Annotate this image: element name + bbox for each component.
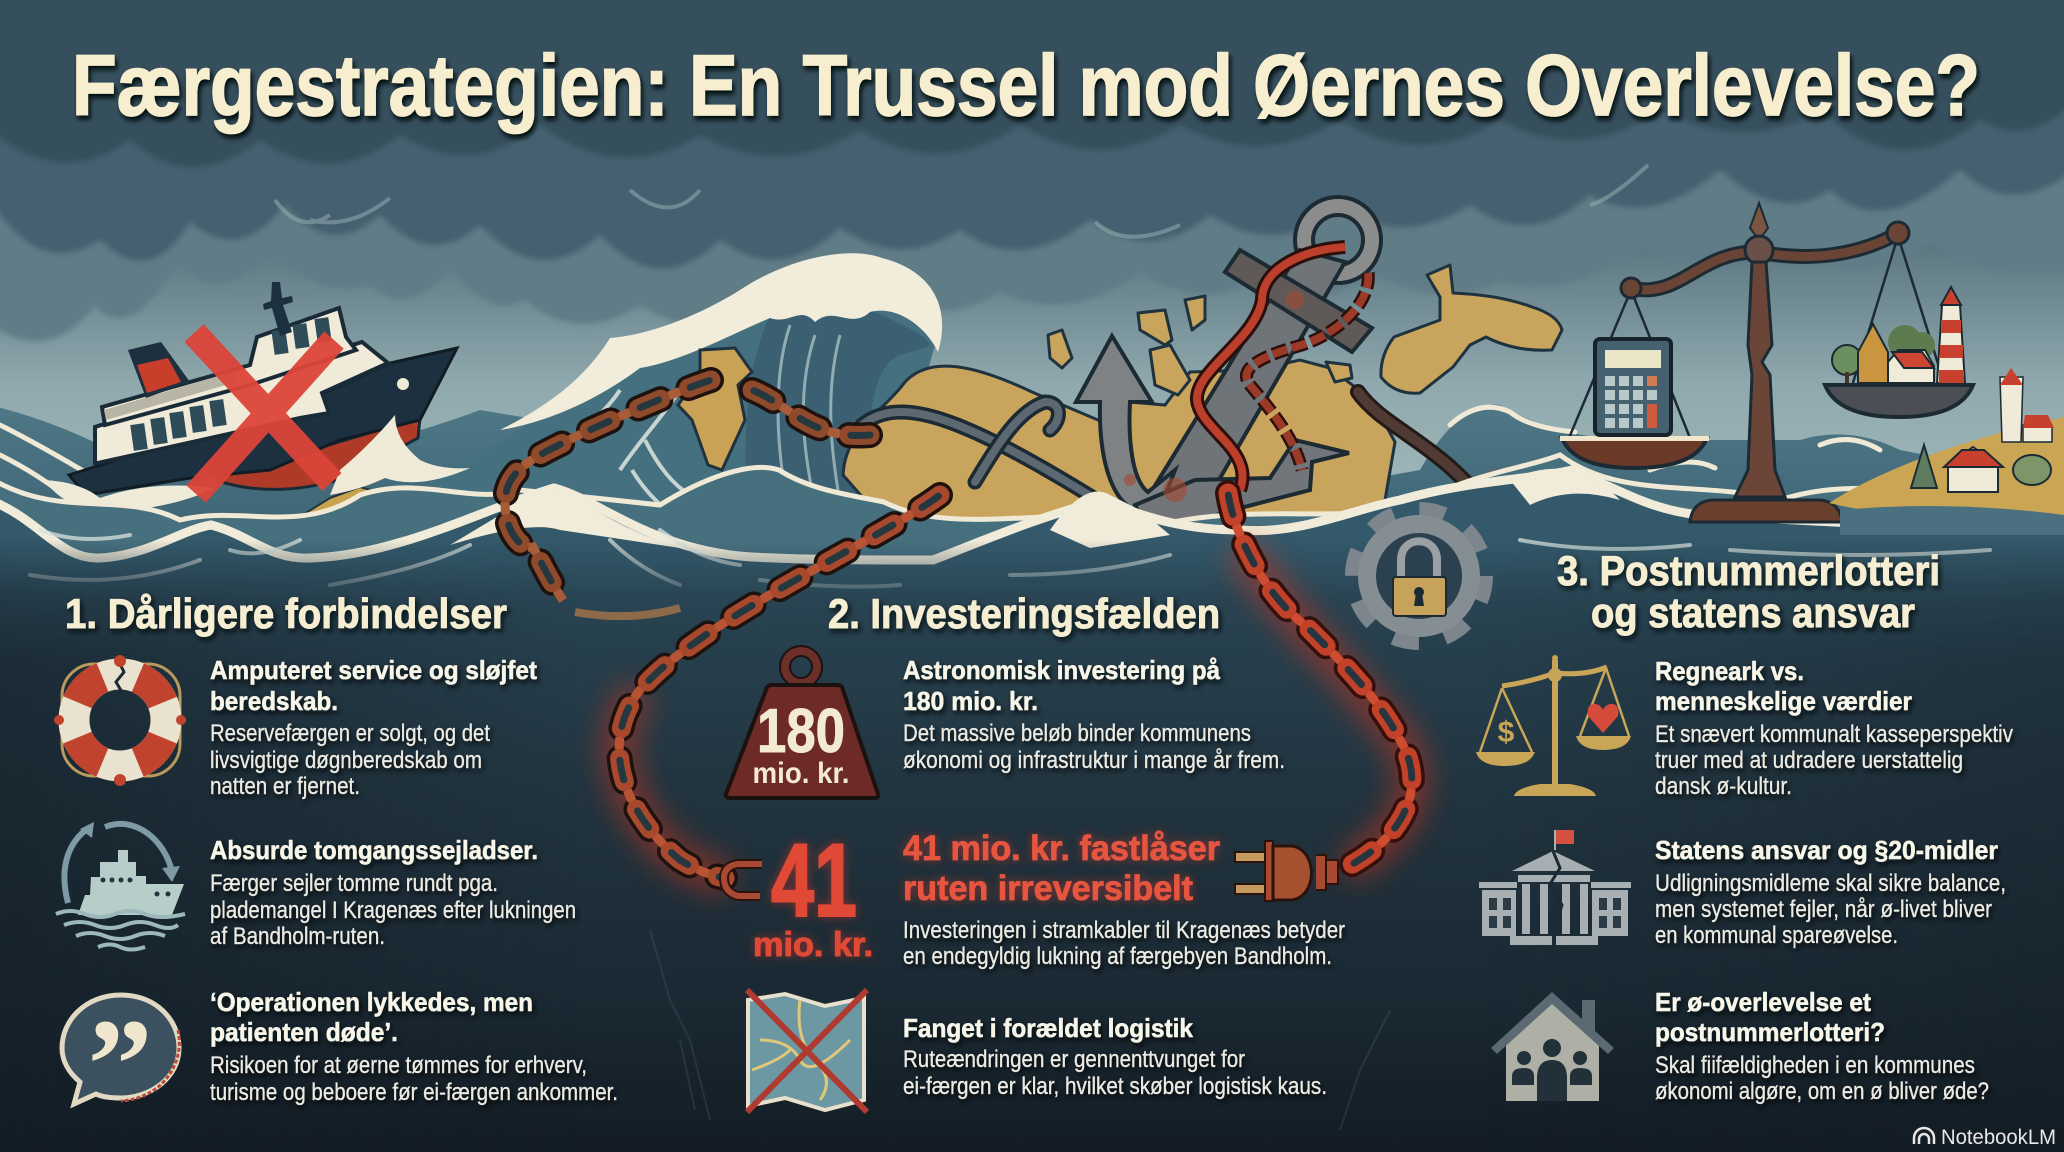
text: Amputeret service: Amputeret service og sløjfet (210, 655, 537, 685)
text: Astronomisk investering: økonomi og infrastruktur i mange år frem. (903, 747, 1285, 774)
back sea foam (0, 407, 1880, 500)
icon: large scales (1560, 203, 1973, 522)
heading: section 1: 1. Dårligere forbindelser (65, 590, 507, 637)
heading: section 3: 3. Postnummerlotteri (1557, 547, 1940, 594)
text: 41 mio. kr. fastlåser (903, 829, 1345, 970)
chain: between islands (752, 390, 870, 435)
text: Astronomisk investering (903, 655, 1285, 774)
background: stormy sky (0, 0, 2064, 620)
text: Absurde tomgangssejladser (210, 835, 576, 950)
text: Absurde tomgangssejladser: plademangel I Kragenæs efter lukningen (210, 897, 576, 924)
icon: quote bubble: ” (88, 993, 152, 1137)
icon: house with family (1491, 992, 1614, 1101)
background: dark lower panel (0, 540, 2064, 1152)
icon: gold scales (1476, 655, 1631, 796)
icon: broken lifebuoy (54, 655, 186, 786)
chain: glowing red right (1228, 493, 1412, 868)
front waves (0, 455, 2064, 660)
island: right hill with houses (1829, 368, 2064, 535)
text: 41 mio. kr. fastlåser: ruten irreversibelt (903, 869, 1193, 908)
text: Regneark vs.: Et snævert kommunalt kasseperspektiv (1655, 721, 2013, 748)
text: Amputeret service: Reservefærgen er solgt, og det (210, 720, 490, 747)
icon: rusty anchor (1076, 206, 1372, 538)
text: Statens ansvar (1655, 835, 2006, 949)
heading: section 2: 2. Investeringsfælden (828, 590, 1220, 637)
text: Statens ansvar: men systemet fejler, når ø-livet bliver (1655, 896, 1992, 923)
text: Amputeret service (210, 655, 537, 800)
icon: cracked state building (1479, 830, 1631, 945)
logo: NotebookLM: NotebookLM (1941, 1126, 2056, 1149)
text: Er ø-overlevelse: postnummerlotteri? (1655, 1017, 1885, 1047)
island: fragments (1048, 296, 1352, 395)
chain: wrapped around anchor (1197, 247, 1368, 490)
icon: weight 180 mio. kr.: 180 (757, 697, 845, 766)
heading: section 3 (1557, 547, 1940, 636)
icon: gear with padlock (1355, 512, 1483, 640)
stat: 41 mio. kr. (753, 823, 873, 964)
text: Astronomisk investering: 180 mio. kr. (903, 686, 1038, 716)
text: Operationen lykkedes: Risikoen for at øerne tømmes for erhverv, (210, 1052, 587, 1079)
panel: 2. Investeringsfælden (724, 590, 1345, 1112)
icon: gold scales: $ (1498, 716, 1515, 749)
text: Amputeret service: natten er fjernet. (210, 773, 360, 800)
icon: weight 180 mio. kr. (726, 651, 878, 798)
text: Statens ansvar: en kommunal spareøvelse. (1655, 922, 1898, 949)
text: Regneark vs.: dansk ø-kultur. (1655, 773, 1792, 800)
red glow behind chain (619, 547, 1412, 878)
text: Absurde tomgangssejladser: Færger sejler tomme rundt pga. (210, 870, 498, 897)
text: Fanget i forældet logistik: ei-færgen er klar, hvilket skøber logistisk kaus. (903, 1073, 1327, 1100)
text: Er ø-overlevelse (1655, 987, 1989, 1105)
text: Astronomisk investering: Astronomisk investering på (903, 655, 1220, 685)
icon: crossed-out map (747, 990, 867, 1112)
text: Regneark vs.: menneskelige værdier (1655, 686, 1912, 716)
stat: 41 mio. kr.: 41 (771, 823, 857, 939)
island: left fragment (678, 348, 752, 470)
icon: cable plug (1235, 841, 1338, 901)
text: Operationen lykkedes: ‘Operationen lykkedes, men (210, 987, 533, 1017)
text: 41 mio. kr. fastlåser: Investeringen i stramkabler til Kragenæs betyder (903, 917, 1345, 944)
text: 41 mio. kr. fastlåser: en endegyldig lukning af færgebyen Bandholm. (903, 943, 1332, 970)
text: Operationen lykkedes: patienten døde’. (210, 1017, 398, 1047)
text: Astronomisk investering: Det massive beløb binder kommunens (903, 720, 1251, 747)
background: depth cracks (650, 930, 1390, 1130)
text: Absurde tomgangssejladser: af Bandholm-ruten. (210, 923, 385, 950)
island: central (843, 360, 1395, 570)
heading: section 3: og statens ansvar (1591, 589, 1915, 636)
text: Operationen lykkedes: turisme og beboere før ei-færgen ankommer. (210, 1079, 618, 1106)
text: Absurde tomgangssejladser: Absurde tomgangssejladser. (210, 835, 538, 865)
text: Amputeret service: livsvigtige døgnberedskab om (210, 747, 482, 774)
text: Er ø-overlevelse: Skal fiifældigheden i en kommunes (1655, 1052, 1975, 1079)
icon: calculator (1595, 339, 1671, 435)
panel: 3. Postnummerlotteri (1476, 547, 2013, 1105)
icon: cable socket (724, 864, 762, 896)
text: Er ø-overlevelse: økonomi algøre, om en ø bliver øde? (1655, 1078, 1989, 1105)
icon: sinking ferry with red X (45, 282, 470, 527)
island: north-east (1381, 265, 1562, 393)
text: Regneark vs. (1655, 656, 2013, 800)
storm clouds (0, 0, 2064, 341)
icon: idle ferry with loop arrows (56, 822, 185, 950)
text: Amputeret service: beredskab. (210, 686, 338, 716)
chain: rusty left loop (505, 380, 711, 616)
back sea (0, 405, 2064, 640)
text: Regneark vs.: truer med at udradere uerstattelig (1655, 747, 1963, 774)
stat: 41 mio. kr.: mio. kr. (753, 926, 873, 964)
icon: quote bubble (62, 993, 179, 1137)
background: side vignette (0, 550, 2064, 1002)
text: Regneark vs.: Regneark vs. (1655, 656, 1804, 686)
icon: village on scale pan (1825, 287, 1973, 417)
text: Er ø-overlevelse: Er ø-overlevelse et (1655, 987, 1871, 1017)
text: Fanget i forældet logistik: Fanget i forældet logistik (903, 1013, 1193, 1043)
text: 41 mio. kr. fastlåser: 41 mio. kr. fastlåser (903, 829, 1220, 868)
text: Operationen lykkedes (210, 987, 618, 1106)
text: Fanget i forældet logistik: Ruteændringen er gennenttvunget for (903, 1046, 1245, 1073)
cloud highlights (275, 165, 1648, 237)
big wave (430, 253, 942, 540)
cables: cut power cables (862, 392, 1550, 515)
panel: 1. Dårligere forbindelser (54, 590, 618, 1137)
chain: investment chain left (619, 495, 940, 878)
text: Fanget i forældet logistik (903, 1013, 1327, 1100)
icon: weight 180 mio. kr.: mio. kr. (752, 757, 850, 790)
text: Statens ansvar: Udligningsmidleme skal sikre balance, (1655, 870, 2006, 897)
text: Statens ansvar: Statens ansvar og §20-midler (1655, 835, 1998, 865)
